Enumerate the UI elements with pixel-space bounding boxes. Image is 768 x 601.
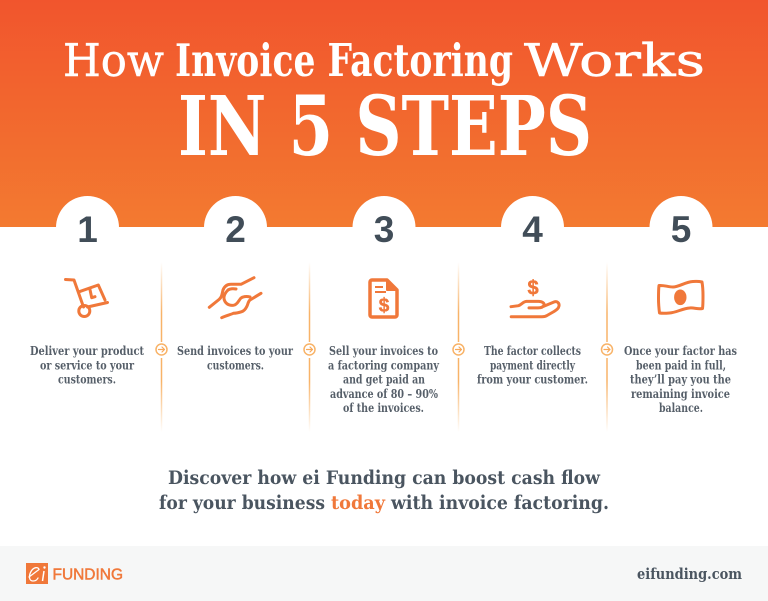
step 4	[477, 196, 588, 386]
call to action: Discover how ei Funding can boost cash flow	[168, 467, 601, 489]
icon: handshake	[209, 278, 261, 318]
number 2: 2	[225, 209, 246, 250]
text: step 5: balance.	[659, 401, 703, 415]
text: step 5: been paid in full,	[636, 358, 726, 372]
call to action	[159, 467, 609, 514]
text: step 5: Once your factor has	[624, 344, 737, 358]
text: step 5: they’ll pay you the	[630, 372, 731, 386]
text: step 1: or service to your	[40, 358, 135, 372]
text: step 4: from your customer.	[477, 372, 588, 386]
footer band	[0, 546, 768, 601]
header banner	[0, 0, 768, 227]
logo: ei Funding: FUNDING	[52, 566, 123, 584]
text: step 5: remaining invoice	[631, 387, 730, 401]
text: step 3: of the invoices.	[343, 401, 424, 415]
step dividers with arrows	[156, 262, 612, 432]
number 5: 5	[671, 209, 691, 250]
text: step 5	[624, 344, 737, 415]
text: step 1: Deliver your product	[30, 344, 144, 358]
number 1	[56, 196, 119, 259]
step 5	[624, 196, 737, 415]
number 4: 4	[522, 209, 543, 250]
text: step 3: advance of 80 – 90%	[330, 387, 438, 401]
icon: banknote	[658, 281, 703, 313]
text: step 4: The factor collects	[484, 344, 581, 358]
text: step 3: Sell your invoices to	[329, 344, 438, 358]
text: step 4: payment directly	[490, 358, 576, 372]
title	[63, 34, 705, 175]
title: IN 5 STEPS	[178, 79, 592, 175]
text: step 2: Send invoices to your	[177, 344, 294, 358]
icon: invoice document with dollar: $	[379, 296, 390, 316]
logo: ei Funding	[26, 563, 123, 584]
text: step 3: a factoring company	[328, 358, 440, 372]
text: step 2: customers.	[207, 358, 264, 372]
number 4	[501, 196, 564, 259]
text: step 2	[177, 344, 294, 372]
call to action: today	[331, 492, 386, 514]
text: step 4	[477, 344, 588, 386]
step 2	[177, 196, 294, 372]
step 3	[328, 196, 440, 415]
icon: hand holding dollar	[511, 278, 559, 317]
number 3: 3	[374, 209, 394, 250]
icon: hand holding dollar: $	[527, 278, 539, 300]
step 1	[30, 196, 144, 386]
icon: invoice document with dollar	[370, 280, 397, 317]
title: Works	[524, 34, 705, 87]
number 1: 1	[77, 209, 98, 250]
call to action: with invoice factoring.	[390, 492, 609, 514]
text: step 1: customers.	[58, 372, 116, 386]
call to action: for your business	[159, 492, 325, 514]
website url: eifunding.com	[637, 566, 743, 583]
text: step 1	[30, 344, 144, 386]
title: Invoice Factoring	[175, 34, 513, 87]
number 3	[352, 196, 416, 259]
text: step 3	[328, 344, 440, 415]
number 2	[204, 196, 267, 259]
icon: hand truck with box	[66, 280, 108, 316]
text: step 3: and get paid an	[343, 372, 425, 386]
number 5	[650, 196, 712, 259]
title: How	[63, 34, 164, 87]
